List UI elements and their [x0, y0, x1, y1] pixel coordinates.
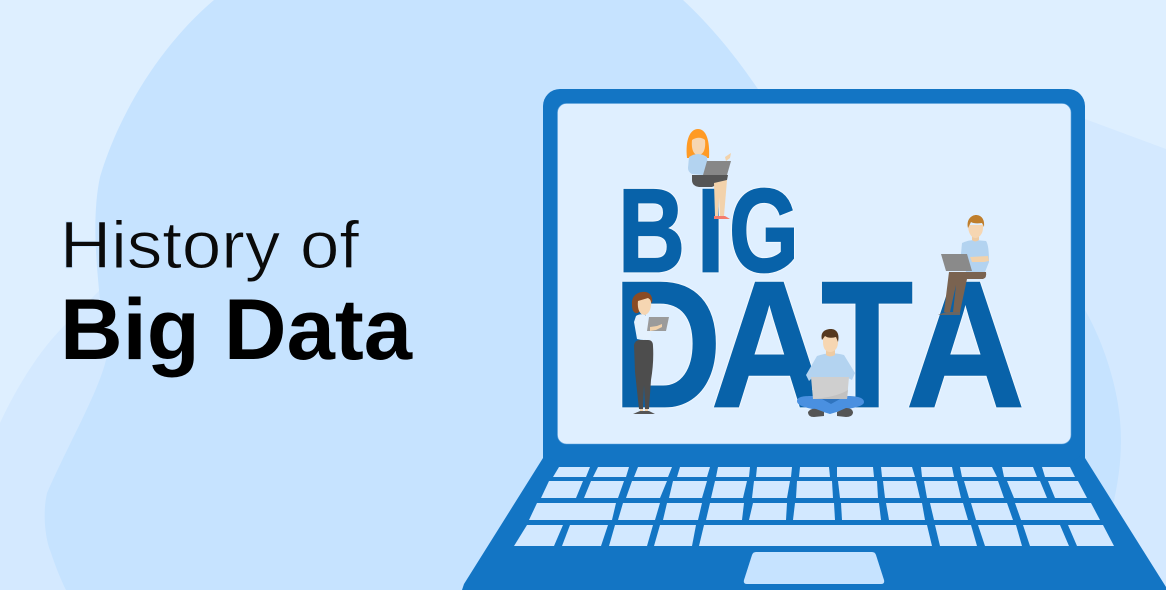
- keyboard: [514, 467, 1114, 546]
- laptop: [462, 89, 1166, 590]
- laptop screen: [558, 104, 1071, 444]
- person: man sitting on letter A with laptop: [938, 215, 989, 315]
- big data lettering: [613, 163, 1025, 446]
- word: BIG: G: [729, 165, 799, 297]
- word: BIG: B: [618, 163, 685, 297]
- word: DATA: A: [906, 244, 1025, 445]
- title line: History of: History of: [60, 208, 359, 283]
- title line: Big Data: Big Data: [60, 282, 413, 378]
- word: DATA: A: [711, 244, 828, 445]
- person: woman with tablet: [632, 292, 669, 414]
- word: BIG: I: [696, 165, 725, 297]
- laptop lid: [543, 89, 1085, 461]
- word: DATA: D: [613, 245, 721, 446]
- word: DATA: [613, 244, 1025, 446]
- title: [60, 208, 413, 378]
- person: woman with laptop on BIG: [687, 129, 731, 219]
- word: DATA: T: [821, 245, 913, 446]
- person: man sitting cross-legged with laptop: [797, 329, 864, 417]
- word: BIG: [618, 163, 799, 297]
- laptop base: [462, 440, 1166, 590]
- trackpad: [744, 552, 884, 584]
